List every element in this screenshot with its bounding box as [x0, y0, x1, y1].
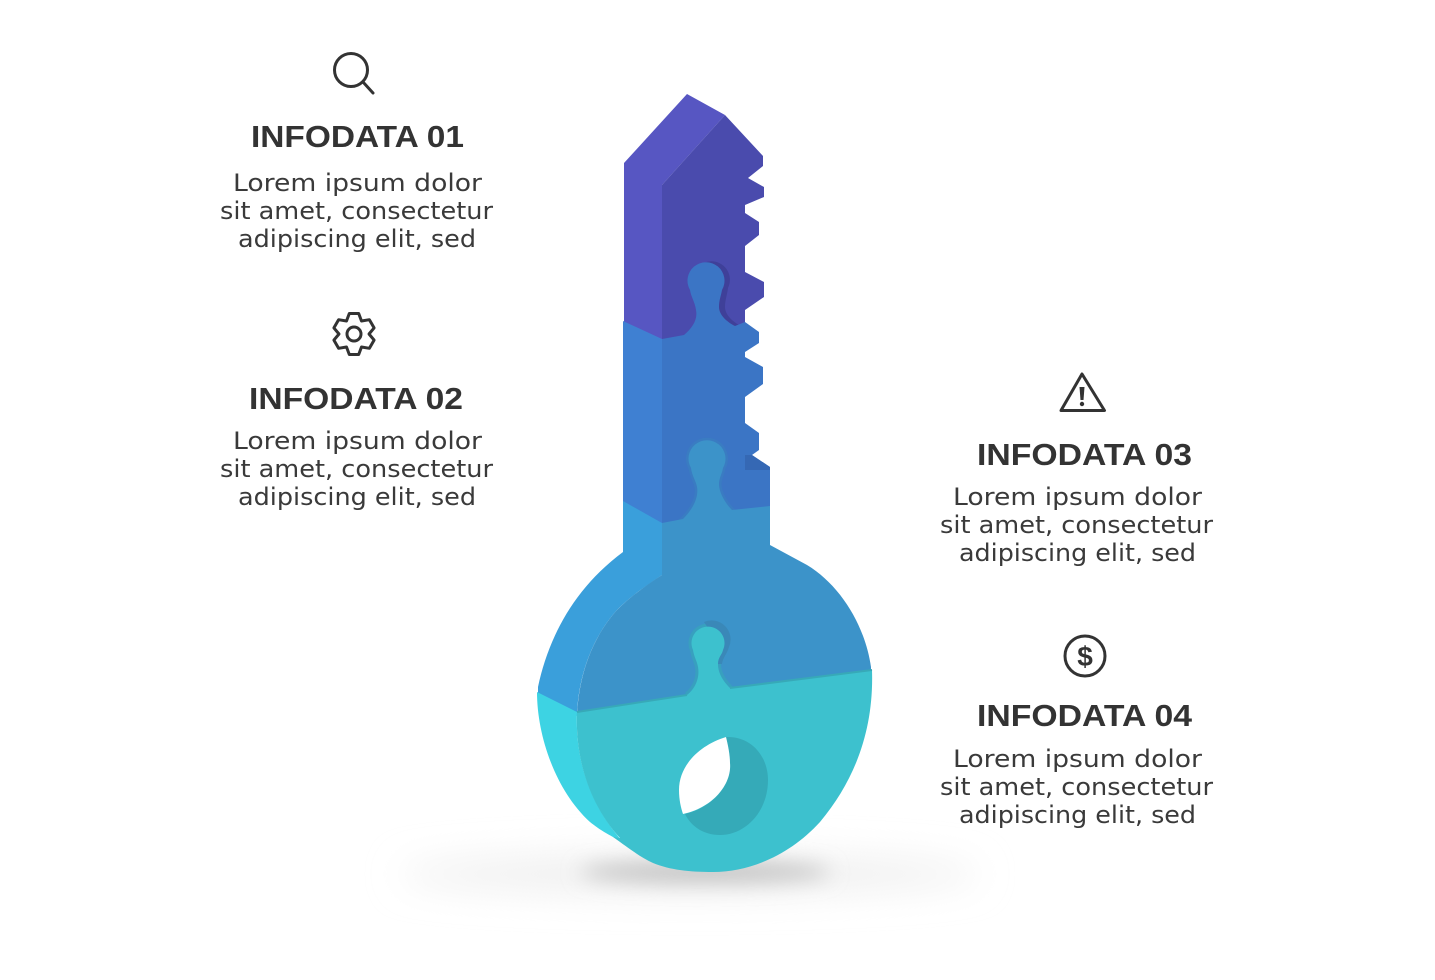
key segment 2: blue blade — [623, 262, 770, 528]
text block 03: adipiscing elit, sed — [959, 539, 1196, 567]
text block 04: Lorem ipsum dolor — [953, 745, 1202, 773]
heading 02: INFODATA 02 — [249, 381, 463, 416]
ground shadow — [400, 856, 980, 892]
text block 04: sit amet, consectetur — [940, 773, 1213, 801]
block: infodata 01 — [220, 54, 493, 253]
icon: warning triangle — [1061, 374, 1104, 410]
key illustration — [537, 94, 872, 872]
text block 01: Lorem ipsum dolor — [233, 169, 482, 197]
text block 01: sit amet, consectetur — [220, 197, 493, 225]
block: infodata 04 — [940, 636, 1213, 829]
heading 01: INFODATA 01 — [251, 119, 464, 154]
text block 04: adipiscing elit, sed — [959, 801, 1196, 829]
text block 04 — [940, 745, 1213, 829]
heading 03: INFODATA 03 — [977, 437, 1192, 472]
text block 02: adipiscing elit, sed — [238, 483, 476, 511]
icon: magnifier — [334, 54, 373, 93]
text block 03 — [940, 483, 1213, 567]
text block 01: adipiscing elit, sed — [238, 225, 476, 253]
keyhole opening — [679, 737, 730, 814]
block: infodata 02 — [220, 314, 493, 511]
keyhole inner wall — [685, 737, 768, 835]
text block 03: sit amet, consectetur — [940, 511, 1213, 539]
key segment 3: light blue shoulder — [538, 440, 871, 718]
icon: gear — [334, 314, 374, 354]
text block 01 — [220, 169, 493, 253]
text block 03: Lorem ipsum dolor — [953, 483, 1202, 511]
icon: dollar coin: $ — [1077, 641, 1093, 672]
icon: dollar coin — [1065, 636, 1105, 676]
heading 04: INFODATA 04 — [977, 698, 1193, 733]
text block 02: Lorem ipsum dolor — [233, 427, 482, 455]
text block 02 — [220, 427, 493, 511]
key segment 1: purple blade tip — [624, 94, 764, 342]
key segment 4: teal bow with hole — [537, 627, 872, 872]
text block 02: sit amet, consectetur — [220, 455, 493, 483]
block: infodata 03 — [940, 374, 1213, 567]
